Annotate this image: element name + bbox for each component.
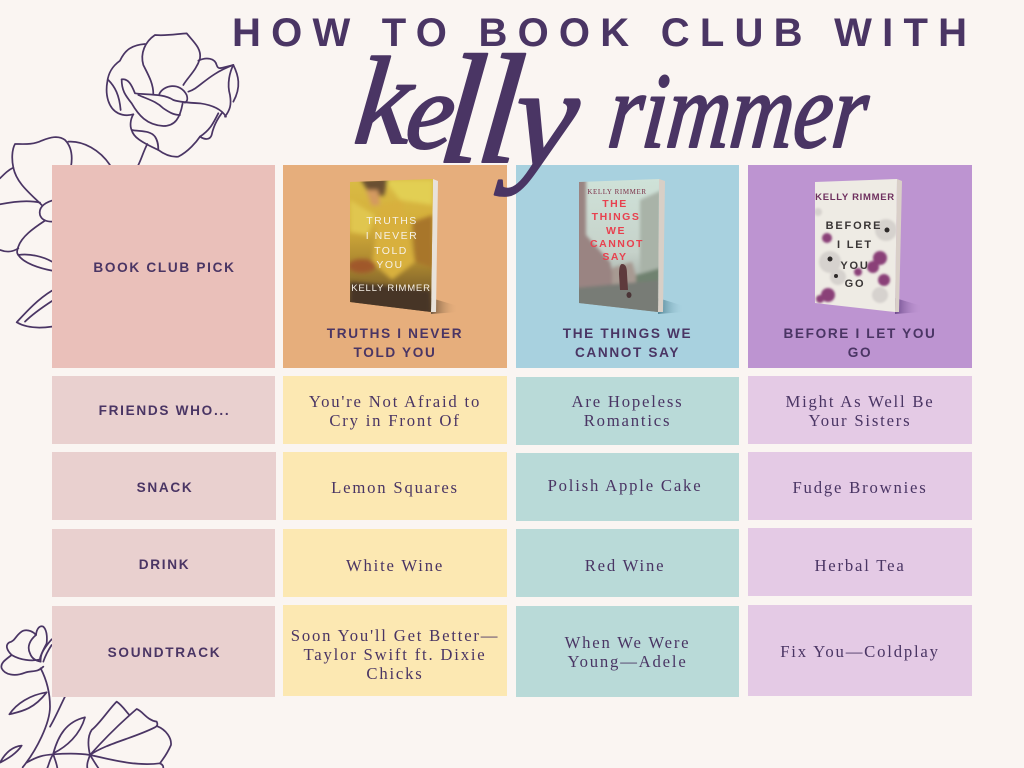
row label: book club pick: BOOK CLUB PICK xyxy=(93,260,236,275)
cell: soundtrack, book 1: Chicks xyxy=(366,664,424,683)
cell: soundtrack, book 1: Taylor Swift ft. Dixie xyxy=(303,645,487,664)
book cover: Truths I Never Told You: YOU xyxy=(376,259,404,271)
book cover: The Things We Cannot Say: THINGS xyxy=(592,211,640,223)
book title xyxy=(326,326,463,360)
book cover: Before I Let You Go: KELLY RIMMER xyxy=(815,192,895,203)
cell: friends, book 1: You're Not Afraid to xyxy=(309,392,481,411)
book title xyxy=(562,326,692,360)
row label: book club pick xyxy=(52,165,275,368)
cell: soundtrack, book 2: Young—Adele xyxy=(567,652,688,670)
cell: snack, book 3: Fudge Brownies xyxy=(792,478,928,496)
cell: friends, book 2: Are Hopeless xyxy=(572,392,683,411)
book cover: Before I Let You Go: GO xyxy=(845,278,865,290)
cell: drink, book 1 xyxy=(283,529,507,597)
cell: friends, book 3 xyxy=(748,376,972,444)
row label: snack: SNACK xyxy=(137,480,193,494)
book title xyxy=(783,326,937,360)
book cover: The Things We Cannot Say: WE xyxy=(606,225,626,237)
cell: drink, book 3: Herbal Tea xyxy=(814,556,906,574)
illustration: floral line art, top left xyxy=(0,32,240,328)
book cover: Before I Let You Go: YOU xyxy=(840,260,870,272)
book title: TRUTHS I NEVER xyxy=(327,326,463,341)
cell: friends, book 2: Romantics xyxy=(584,411,671,430)
row label: friends who: FRIENDS WHO... xyxy=(99,403,230,418)
title: kelly rimmer script: l xyxy=(432,23,494,196)
book cover: Truths I Never Told You: KELLY RIMMER xyxy=(351,283,431,294)
book cover: Truths I Never Told You: TRUTHS xyxy=(366,215,418,227)
cell: friends, book 2 xyxy=(516,377,739,445)
cell: snack, book 3 xyxy=(748,452,972,520)
title: kelly rimmer script: l xyxy=(470,23,532,196)
row label: drink: DRINK xyxy=(139,556,190,572)
cell: soundtrack, book 1 xyxy=(283,605,507,696)
cell: friends, book 3: Might As Well Be xyxy=(785,392,935,411)
row label: snack xyxy=(52,452,276,520)
book cover: Before I Let You Go: BEFORE xyxy=(826,220,882,232)
book cover: The Things We Cannot Say: KELLY RIMMER xyxy=(587,188,647,196)
cell: drink, book 2: Red Wine xyxy=(585,556,665,574)
cell: soundtrack, book 2 xyxy=(516,606,739,697)
book cover: The Things We Cannot Say: CANNOT xyxy=(590,238,644,250)
cell: snack, book 1: Lemon Squares xyxy=(331,478,459,496)
row label: drink xyxy=(52,529,275,597)
cell: friends, book 1 xyxy=(283,376,507,444)
cell: friends, book 1: Cry in Front Of xyxy=(329,411,461,430)
cell: soundtrack, book 1: Soon You'll Get Better— xyxy=(291,626,499,645)
panel: Before I Let You Go xyxy=(748,165,972,368)
row label: soundtrack xyxy=(52,606,275,697)
cell: drink, book 3 xyxy=(748,528,972,596)
title: kelly rimmer script: e xyxy=(401,53,461,172)
book title: BEFORE I LET YOU xyxy=(783,326,937,341)
panel: The Things We Cannot Say xyxy=(516,165,739,368)
cell: snack, book 2 xyxy=(516,453,739,521)
title: how to book club with: HOW TO BOOK CLUB WITH xyxy=(232,11,967,55)
cell: drink, book 2 xyxy=(516,529,739,597)
book cover: Truths I Never Told You: TOLD xyxy=(374,245,408,257)
cell: soundtrack, book 2: When We Were xyxy=(565,632,690,652)
book cover: Truths I Never Told You: I NEVER xyxy=(366,230,418,242)
book title: GO xyxy=(848,345,872,360)
row label: soundtrack: SOUNDTRACK xyxy=(108,645,221,660)
cell: drink, book 1: White Wine xyxy=(346,556,444,574)
book cover: The Things We Cannot Say: THE xyxy=(602,198,628,210)
book cover: Before I Let You Go: I LET xyxy=(837,239,873,251)
row label: friends who xyxy=(52,376,275,444)
book cover: Before I Let You Go xyxy=(815,179,914,314)
book cover: The Things We Cannot Say: SAY xyxy=(602,251,628,263)
illustration: floral line art, bottom left xyxy=(0,625,172,768)
cell: friends, book 3: Your Sisters xyxy=(809,411,911,430)
title: kelly rimmer script: y xyxy=(494,38,587,197)
cell: soundtrack, book 3: Fix You—Coldplay xyxy=(780,642,940,661)
book title: THE THINGS WE xyxy=(563,326,692,341)
cell: snack, book 2: Polish Apple Cake xyxy=(548,476,702,494)
book cover: Truths I Never Told You xyxy=(350,179,450,314)
book title: CANNOT SAY xyxy=(575,345,680,360)
book title: TOLD YOU xyxy=(354,345,436,360)
title: kelly rimmer script xyxy=(349,23,875,197)
cell: soundtrack, book 3 xyxy=(748,605,972,696)
title: kelly rimmer script: rimmer xyxy=(603,52,875,171)
cell: snack, book 1 xyxy=(283,452,507,520)
title: kelly rimmer script: k xyxy=(349,32,421,171)
book cover: The Things We Cannot Say xyxy=(579,179,676,314)
panel: Truths I Never Told You xyxy=(283,165,507,368)
